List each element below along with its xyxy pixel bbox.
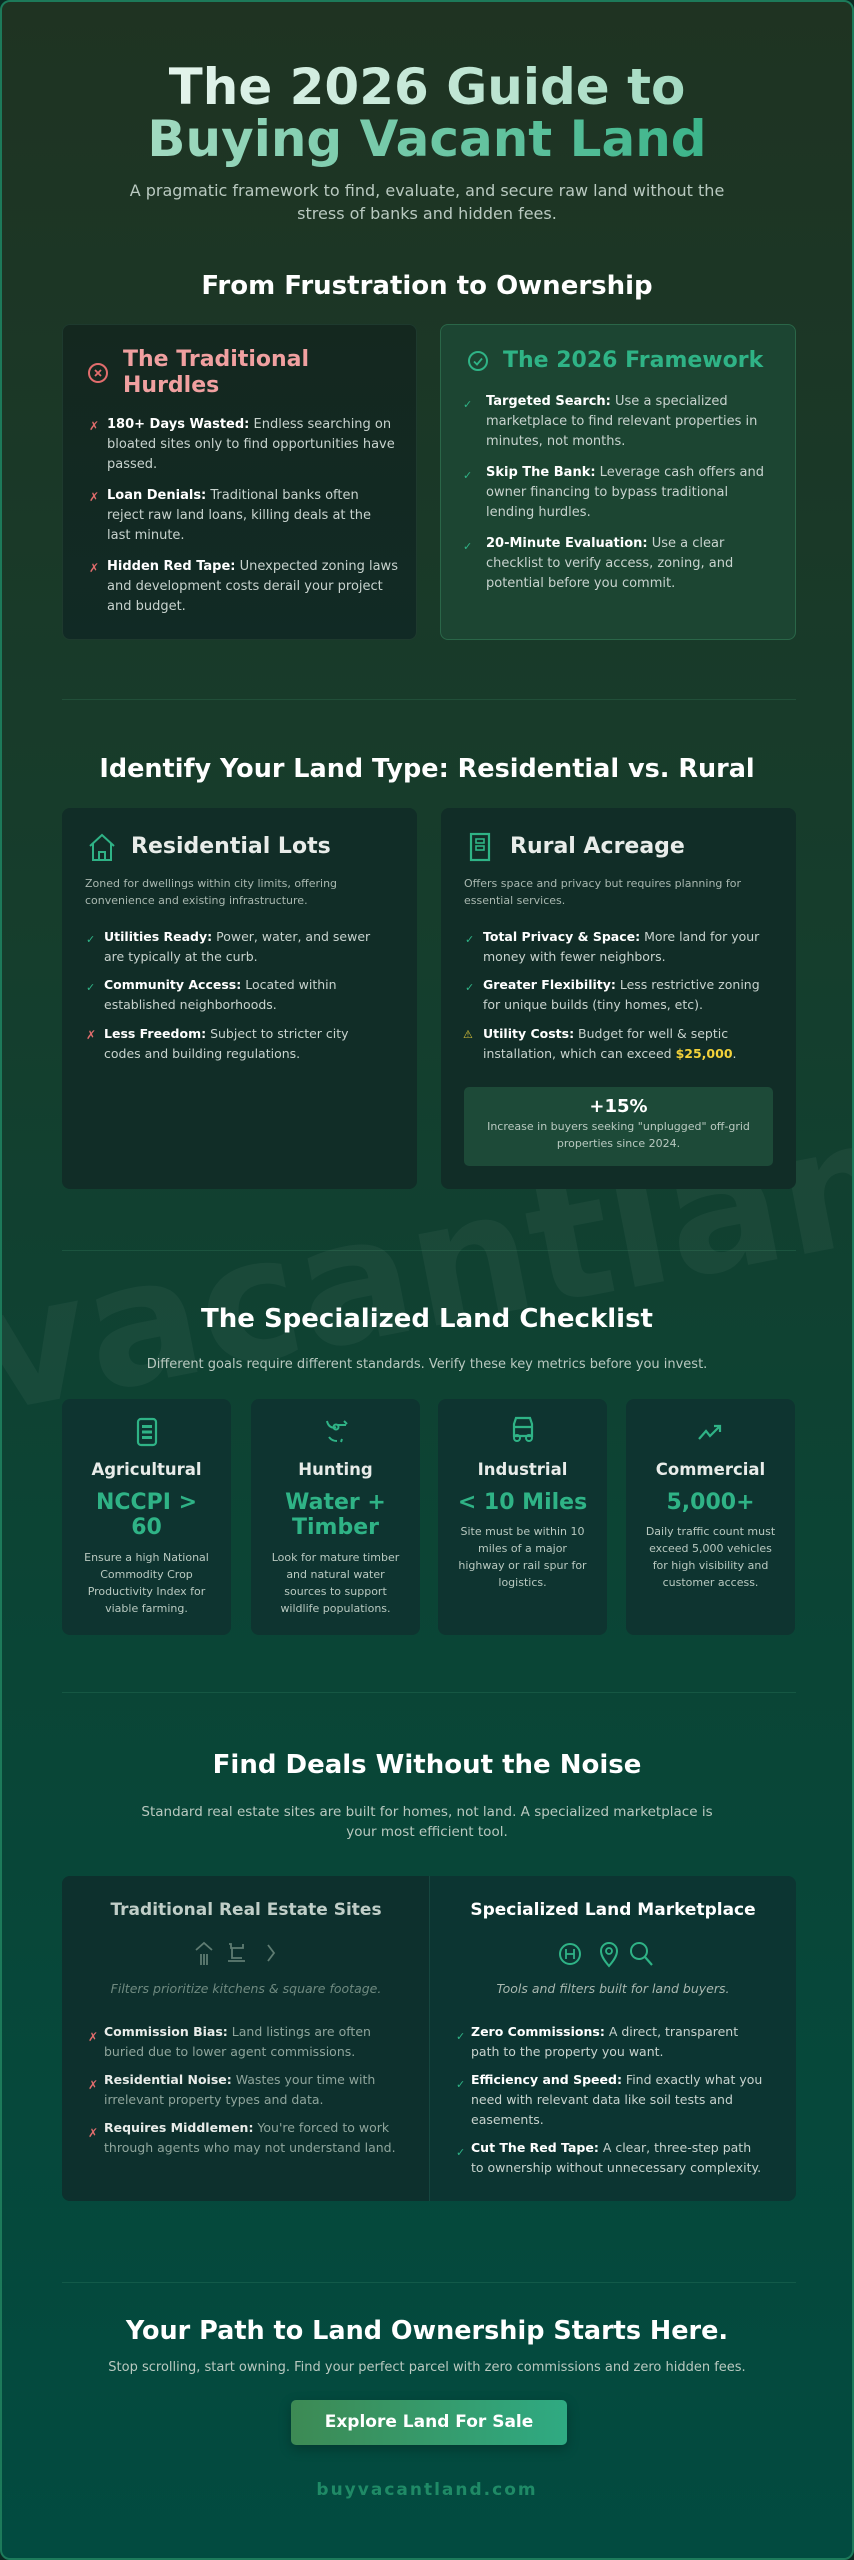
card: industrial: miles of a major (478, 1542, 567, 1555)
column: specialized marketplace: ✓ (456, 2078, 465, 2091)
column: traditional sites: ✗ (88, 2078, 98, 2092)
item list: Skip The Bank: Leverage cash offers and (486, 465, 764, 480)
card: agricultural: Ensure a high National (84, 1551, 209, 1564)
heading: Residential Lots (131, 834, 331, 859)
stat callout: +15% (589, 1096, 648, 1117)
footer url: buyvacantland.com (316, 2480, 538, 2500)
item list: Loan Denials: Traditional banks often (107, 488, 359, 503)
item list: potential before you commit. (486, 576, 675, 591)
column: traditional sites: through agents who may not understand land. (104, 2140, 396, 2155)
icon: house (89, 834, 115, 861)
title: Buying Vacant Land (147, 110, 707, 168)
CTA button (291, 2400, 567, 2445)
item list: ✓ (465, 933, 474, 946)
item list: owner financing to bypass traditional (486, 485, 728, 500)
column: specialized marketplace: Zero Commissions: A direct, transparent (471, 2024, 738, 2039)
column: specialized marketplace: ✓ (456, 2030, 465, 2043)
card: hunting: Hunting (298, 1460, 373, 1479)
card: hunting: and natural water (286, 1568, 385, 1581)
description: Zoned for dwellings within city limits, offering (85, 877, 337, 890)
heading: The 2026 Framework (503, 348, 763, 373)
item list (463, 394, 764, 591)
icon: circle x (88, 363, 108, 383)
icon: target (326, 1420, 348, 1442)
column: traditional sites: ✗ (88, 2030, 98, 2044)
subtitle (141, 1804, 713, 1840)
heading: The Traditional (123, 347, 309, 372)
CTA button: Explore Land For Sale (325, 2412, 533, 2432)
column: traditional sites: Commission Bias: Land listings are often (104, 2024, 371, 2039)
item list: lending hurdles. (486, 505, 591, 520)
card: agricultural: NCCPI > (96, 1490, 197, 1515)
item list (89, 417, 398, 614)
item list: Greater Flexibility: Less restrictive zoning (483, 977, 760, 992)
item list: ✗ (86, 1028, 96, 1042)
item list: ✗ (89, 561, 99, 575)
column: traditional sites (62, 1876, 430, 2201)
subtitle: your most efficient tool. (346, 1824, 508, 1840)
card: commercial: customer access. (663, 1576, 758, 1589)
item list: Utility Costs: Budget for well & septic (483, 1026, 728, 1041)
item list: reject raw land loans, killing deals at the (107, 508, 371, 523)
card: agricultural: Commodity Crop (100, 1568, 193, 1581)
card: commercial: exceed 5,000 vehicles (649, 1542, 772, 1555)
item list: 20-Minute Evaluation: Use a clear (486, 536, 724, 551)
item list: and budget. (107, 599, 186, 614)
column: specialized marketplace: Tools and filters built for land buyers. (496, 1981, 729, 1996)
heading: Rural Acreage (510, 834, 685, 859)
card: industrial: logistics. (498, 1576, 547, 1589)
card: agricultural: viable farming. (105, 1602, 188, 1615)
item list: Less Freedom: Subject to stricter city (104, 1026, 349, 1041)
item list: checklist to verify access, zoning, and (486, 556, 733, 571)
card: industrial: Site must be within 10 (461, 1525, 584, 1538)
icons: teal (559, 1942, 653, 1968)
item list: Community Access: Located within (104, 977, 337, 992)
card: commercial: 5,000+ (666, 1490, 755, 1515)
stat callout: Increase in buyers seeking "unplugged" off-grid (487, 1120, 750, 1133)
icon: document (470, 832, 490, 862)
item list: ✓ (463, 398, 472, 411)
heading: Specialized Land Checklist: The Specialized Land Checklist (201, 1304, 653, 1334)
card: industrial (438, 1399, 607, 1635)
column: traditional sites: Traditional Real Estate Sites (110, 1900, 382, 1920)
subtitle: Different goals require different standards. Verify these key metrics before you invest. (147, 1357, 707, 1372)
column: traditional sites: buried due to lower agent commissions. (104, 2044, 355, 2059)
subtitle: A pragmatic framework to find, evaluate, and secure raw land without the (130, 181, 724, 200)
title: The 2026 Guide to (169, 58, 685, 116)
item list: Targeted Search: Use a specialized (486, 394, 728, 409)
panel: comparison (62, 1876, 796, 2201)
description: Offers space and privacy but requires planning for (464, 877, 741, 890)
item list: ✗ (89, 419, 99, 433)
stat callout: properties since 2024. (557, 1137, 680, 1150)
item list: installation, which can exceed $25,000. (483, 1046, 737, 1061)
description (85, 877, 337, 907)
item list: ⚠ (463, 1028, 473, 1041)
column: specialized marketplace: ✓ (456, 2146, 465, 2159)
card: industrial: highway or rail spur for (458, 1559, 587, 1572)
item list: ✓ (463, 540, 472, 553)
card: industrial: Industrial (478, 1460, 567, 1479)
heading: Find Deals Without the Noise: Find Deals Without the Noise (213, 1750, 641, 1780)
card: hunting: sources to support (284, 1585, 387, 1598)
title (147, 58, 707, 168)
panel: traditional hurdles (62, 324, 417, 640)
card: commercial: Commercial (656, 1460, 765, 1479)
card: hunting: Look for mature timber (272, 1551, 399, 1564)
column: traditional sites: Requires Middlemen: You're forced to work (104, 2120, 389, 2135)
item list: ✓ (86, 981, 95, 994)
subtitle (130, 181, 724, 223)
heading: Identify Your Land Type: Identify Your Land Type: Residential vs. Rural (99, 754, 755, 784)
item list: ✓ (463, 469, 472, 482)
item list: codes and building regulations. (104, 1046, 300, 1061)
description (464, 877, 741, 907)
icon: list (136, 1418, 158, 1446)
item list: marketplace to find relevant properties in (486, 414, 757, 429)
item list (86, 929, 370, 1061)
item list: Hidden Red Tape: Unexpected zoning laws (107, 559, 398, 574)
card: commercial: Daily traffic count must (646, 1525, 775, 1538)
heading: Hurdles (123, 373, 219, 398)
column: specialized marketplace (456, 1900, 762, 2175)
column: traditional sites: Residential Noise: Wastes your time with (104, 2072, 375, 2087)
item list: money with fewer neighbors. (483, 949, 666, 964)
item list: ✓ (465, 981, 474, 994)
item list: Total Privacy & Space: More land for your (483, 929, 759, 944)
icon: check circle (468, 351, 488, 371)
column: specialized marketplace: path to the property you want. (471, 2044, 664, 2059)
description: essential services. (464, 894, 565, 907)
item list: ✗ (89, 490, 99, 504)
card: hunting: Timber (292, 1515, 379, 1540)
item list: Utilities Ready: Power, water, and sewer (104, 929, 370, 944)
CTA subtext: Stop scrolling, start owning. Find your perfect parcel with zero commissions and zero hidden fees. (108, 2360, 746, 2375)
item list: passed. (107, 457, 157, 472)
column: traditional sites: Filters prioritize kitchens & square footage. (111, 1981, 381, 1996)
card: commercial: for high visibility and (653, 1559, 768, 1572)
item list: are typically at the curb. (104, 949, 258, 964)
item list: minutes, not months. (486, 434, 625, 449)
column: traditional sites: irrelevant property types and data. (104, 2092, 323, 2107)
icons: gray (196, 1942, 275, 1965)
CTA heading: Your Path to Land Ownership Starts Here. (126, 2316, 728, 2346)
panel: 2026 framework (440, 324, 796, 640)
item list (463, 929, 760, 1061)
card: hunting: wildlife populations. (280, 1602, 391, 1615)
subtitle: Standard real estate sites are built for homes, not land. A specialized marketplace is (141, 1804, 713, 1820)
column: specialized marketplace: to ownership without unnecessary complexity. (471, 2160, 761, 2175)
card: agricultural: Agricultural (91, 1460, 202, 1479)
column: specialized marketplace: Efficiency and Speed: Find exactly what you (471, 2072, 762, 2087)
description: convenience and existing infrastructure. (85, 894, 308, 907)
item list: for unique builds (tiny homes, etc). (483, 997, 703, 1012)
item list: last minute. (107, 528, 185, 543)
icon: truck (512, 1416, 534, 1442)
card: agricultural: Productivity Index for (88, 1585, 205, 1598)
column: traditional sites: ✗ (88, 2126, 98, 2140)
item list: 180+ Days Wasted: Endless searching on (107, 417, 391, 432)
card: agricultural (62, 1399, 231, 1635)
column: specialized marketplace: need with relevant data like soil tests and (471, 2092, 733, 2107)
column: specialized marketplace: Cut The Red Tape: A clear, three-step path (471, 2140, 751, 2155)
card: hunting (251, 1399, 420, 1635)
item list: and development costs derail your project (107, 579, 383, 594)
column: specialized marketplace: Specialized Land Marketplace (470, 1900, 756, 1920)
item list: ✓ (86, 933, 95, 946)
item list: established neighborhoods. (104, 997, 277, 1012)
card: industrial: < 10 Miles (458, 1490, 587, 1515)
item list: bloated sites only to find opportunities have (107, 437, 395, 452)
stat callout (464, 1087, 773, 1166)
icon: trend arrow (698, 1424, 722, 1440)
heading: From Frustration to Ownership: From Frustration to Ownership (201, 271, 653, 301)
card: agricultural: 60 (131, 1515, 162, 1540)
heading (123, 347, 309, 398)
panel: residential lots (62, 808, 417, 1189)
panel: rural acreage (441, 808, 796, 1189)
card: hunting: Water + (285, 1490, 386, 1515)
subtitle: stress of banks and hidden fees. (297, 204, 557, 223)
card: commercial (626, 1399, 795, 1635)
column: specialized marketplace: easements. (471, 2112, 544, 2127)
